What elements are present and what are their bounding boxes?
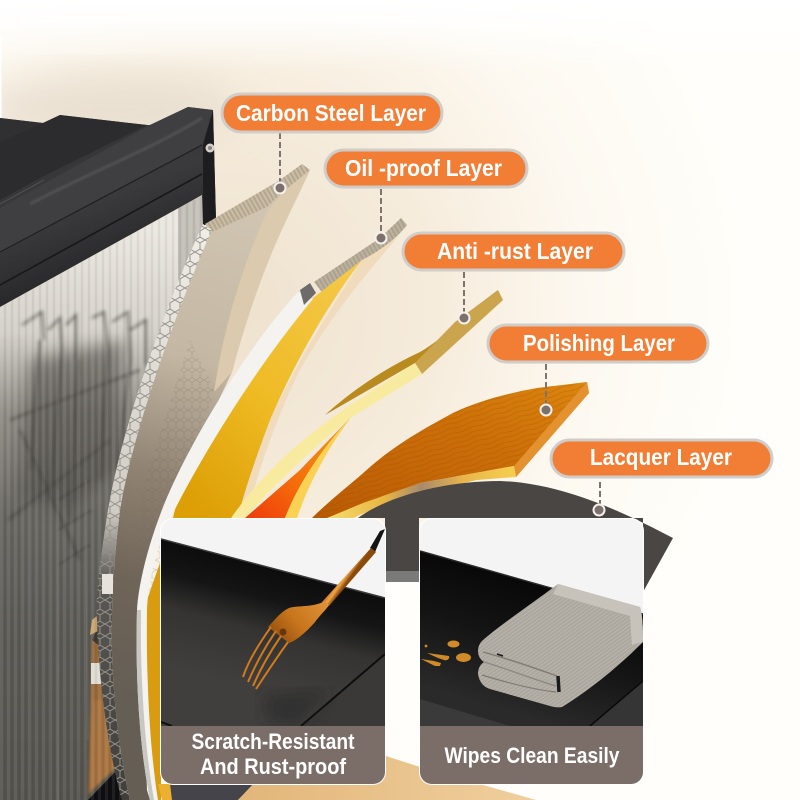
layer: lacquer sheet bbox=[358, 481, 673, 592]
layer: polishing sheet bbox=[312, 382, 589, 518]
layer: oil-proof sheet bbox=[137, 218, 407, 800]
layer: anti-rust sheet bbox=[231, 290, 503, 518]
caption bar bbox=[420, 726, 643, 784]
callout: lacquer layer: Lacquer Layer bbox=[590, 444, 732, 470]
icon: fork bbox=[243, 529, 385, 689]
icon: bolt bbox=[206, 144, 214, 152]
panel: scratch-resistant bbox=[160, 518, 386, 785]
callout: carbon steel layer: Carbon Steel Layer bbox=[236, 100, 426, 126]
callout: lacquer layer bbox=[551, 440, 772, 516]
callout: oil-proof layer bbox=[325, 150, 527, 244]
panel: wipes clean bbox=[419, 518, 644, 785]
callout: anti-rust layer bbox=[403, 233, 624, 324]
caption bar: Wipes Clean Easily bbox=[444, 743, 620, 768]
honeycomb edge bbox=[97, 224, 212, 800]
white edge band bbox=[137, 283, 316, 800]
wooden table top bbox=[238, 756, 536, 800]
layer: carbon steel sheet bbox=[97, 164, 310, 800]
caption bar: And Rust-proof bbox=[200, 754, 347, 779]
icon: folded towel bbox=[478, 584, 643, 707]
callout: oil-proof layer: Oil -proof Layer bbox=[345, 155, 502, 181]
shelf rack: black frame bbox=[0, 107, 216, 307]
caption bar: Scratch-Resistant bbox=[192, 729, 355, 754]
callout: polishing layer: Polishing Layer bbox=[523, 330, 675, 356]
callout: polishing layer bbox=[488, 325, 708, 416]
icon: sauce droplets bbox=[421, 640, 471, 666]
callout: anti-rust layer: Anti -rust Layer bbox=[437, 238, 593, 264]
frosted ribbed panel with blurred rack behind bbox=[0, 36, 212, 800]
callout: carbon steel layer bbox=[222, 94, 442, 194]
dark table edge under left panel bbox=[165, 784, 255, 800]
caption bar bbox=[161, 726, 385, 784]
